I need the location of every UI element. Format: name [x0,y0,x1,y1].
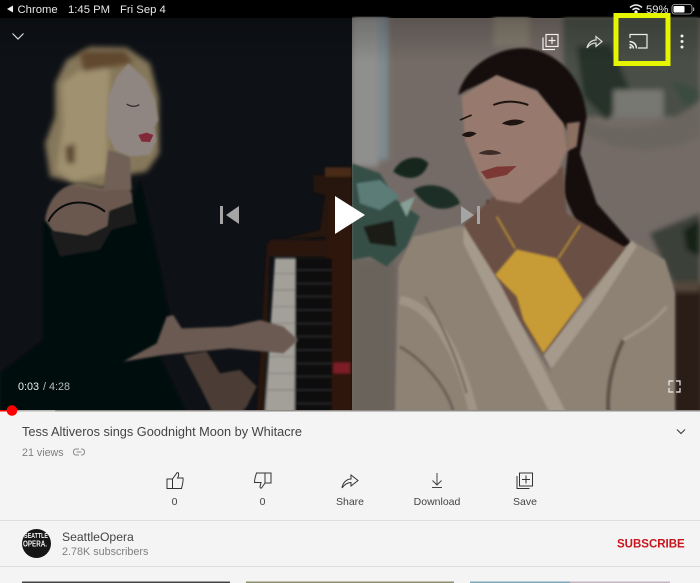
cardigan folds [400,297,667,412]
action: save [513,473,537,508]
yellow top [495,217,583,353]
video panel: pianist on the left [0,18,352,413]
hair [45,47,159,188]
action: download: Download [414,496,461,508]
video panel: singer on the right [352,17,700,417]
icon: more menu [680,34,684,48]
right plant and furniture [650,213,700,417]
battery percentage: 59% [646,4,668,16]
neck and face [103,63,158,190]
icon: share arrow [587,36,602,48]
icon: wifi [630,5,642,13]
status bar [0,0,700,18]
cardigan lapels [463,225,637,413]
icon: back arrow [7,6,13,12]
channel logo: SEATTLE [24,531,48,540]
icon: play [335,196,365,234]
icon: fullscreen [669,381,680,392]
channel name: SeattleOpera [62,530,134,544]
icon: collapse chevron [12,34,24,39]
action: like [167,473,183,508]
video player [0,16,700,417]
icon: previous [220,206,239,224]
progress bar [0,405,700,416]
shoulder and chest skin [44,183,134,237]
dark overlay at top of video [0,18,700,63]
cardigan [395,225,675,413]
status text: Chrome, time and date: 1:45 PM [68,4,110,16]
action: save: Save [513,496,537,508]
channel logo [22,529,51,558]
black top [0,180,187,413]
status text: Chrome, time and date: Fri Sep 4 [120,4,166,16]
action: share [336,475,364,508]
status text: Chrome, time and date: Chrome [18,4,58,16]
neck and chest [463,167,627,360]
action: download [414,473,461,508]
face [462,75,580,203]
icon: link [74,449,84,455]
video title: Tess Altiveros sings Goodnight Moon by Whitacre [22,424,302,439]
next video thumbnails [22,582,670,583]
timestamp: 0:03 / 4:28 [18,381,70,393]
icon: next [461,206,480,224]
icon: add to playlist [543,34,558,50]
plant [352,158,460,267]
action: share: Share [336,496,364,508]
subscribe button: SUBSCRIBE [617,538,685,550]
action: dislike: 0 [260,496,266,508]
arm and hand [123,315,298,413]
lace trim [50,203,137,257]
icon: cast [629,34,647,49]
highlight: yellow box around cast icon [616,16,668,64]
action: like: 0 [172,496,178,508]
icon: battery [672,4,694,14]
subscriber count: 2.78K subscribers [62,546,149,558]
ponytail and hair [458,48,632,253]
action: dislike [254,473,271,508]
view count: 21 views [22,447,64,459]
icon: expand chevron [677,430,685,434]
wall, window and mirror [352,17,700,413]
piano body [257,167,352,413]
channel logo: OPERA. [23,540,47,548]
